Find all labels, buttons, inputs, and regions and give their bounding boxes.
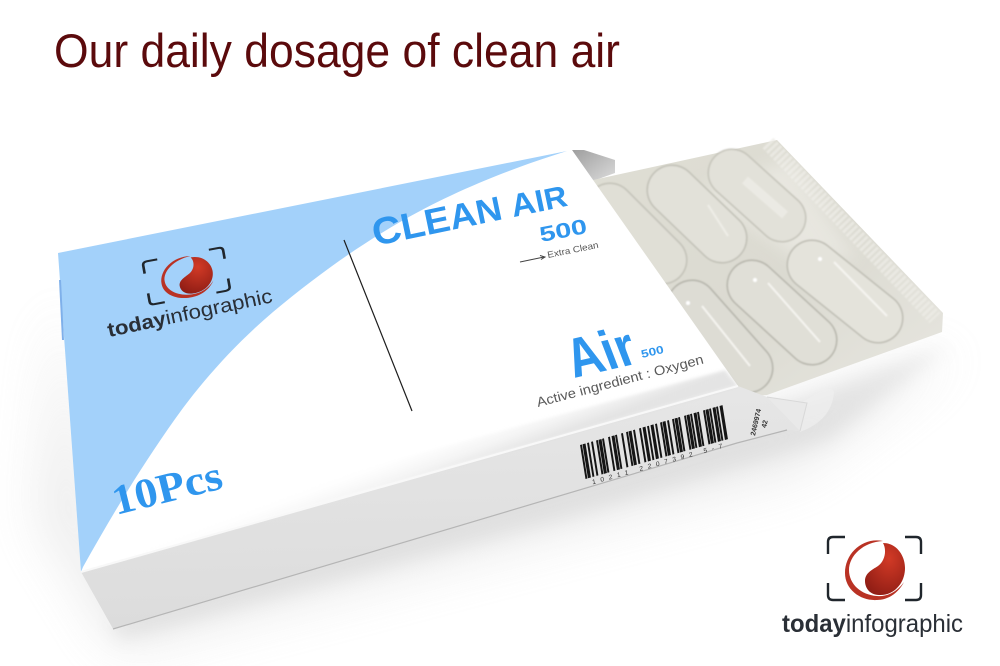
blister: bottom right	[812, 257, 887, 318]
box logo	[105, 247, 274, 342]
batch code: 42	[761, 419, 770, 429]
barcode	[581, 406, 728, 488]
foil sheet	[593, 140, 943, 400]
divider line	[344, 240, 412, 411]
left corner bevel	[81, 572, 113, 629]
batch code: 2469974	[750, 408, 763, 436]
pieces count: 10Pcs	[107, 453, 227, 525]
blue swoosh	[58, 151, 567, 572]
blister: top right	[732, 173, 785, 218]
title: Our daily dosage of clean air	[54, 24, 620, 77]
ground shadow	[40, 300, 960, 650]
blister: top middle	[672, 190, 728, 238]
box	[58, 150, 807, 629]
extra clean label: Extra Clean	[546, 240, 599, 260]
large Air label: Air	[556, 315, 645, 389]
strength 500: 500	[538, 215, 589, 247]
barcode digits: 10211 2207392 5-7	[592, 443, 723, 486]
foil glare	[716, 167, 847, 255]
blister: bottom left	[686, 301, 750, 368]
curved tuck flap	[800, 389, 834, 432]
box side face	[81, 386, 807, 629]
active ingredient text: Active ingredient : Oxygen	[535, 352, 705, 410]
corner logo mark	[828, 537, 921, 600]
barcode bars	[581, 406, 726, 479]
foil crimped edge	[768, 143, 935, 318]
corner logo wordmark: todayinfographic	[782, 610, 963, 638]
back flap of box	[572, 150, 615, 182]
product name: CLEAN AIR	[368, 173, 571, 255]
face shading near fold	[81, 370, 738, 572]
box top face	[58, 150, 738, 572]
small 500 label: 500	[640, 344, 665, 361]
arrow	[520, 256, 545, 262]
blister: partial left	[610, 207, 663, 260]
box logo mark	[143, 247, 230, 305]
corner logo	[782, 537, 963, 638]
blister pack	[593, 140, 943, 400]
left edge sliver	[59, 280, 64, 340]
fold highlight	[81, 386, 738, 572]
box logo wordmark: todayinfographic	[105, 285, 274, 342]
lower edge line	[113, 430, 787, 629]
blister: bottom middle	[752, 278, 820, 342]
tab cut	[767, 397, 807, 431]
